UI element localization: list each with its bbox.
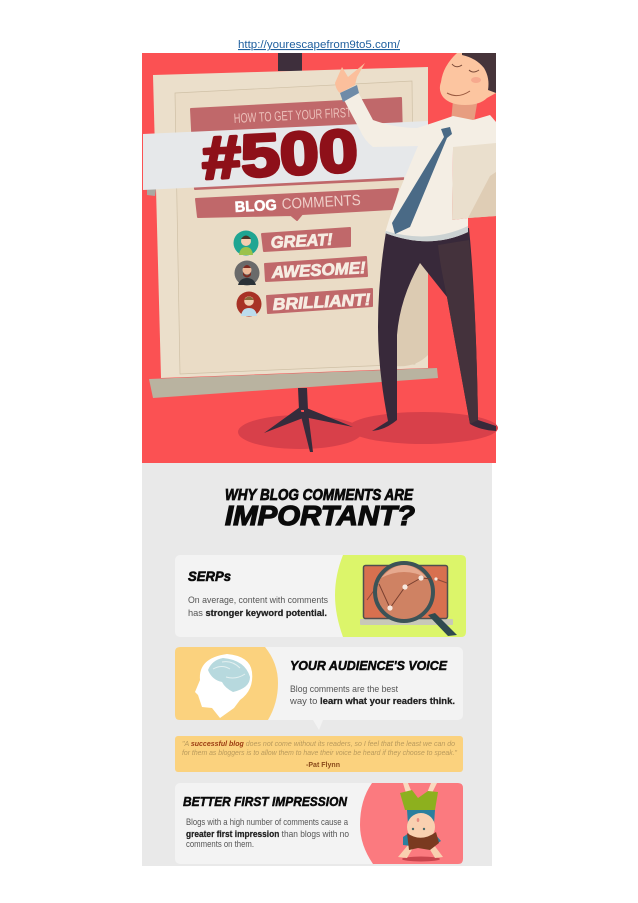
banner shadow xyxy=(147,189,156,196)
board hanger xyxy=(278,53,302,71)
callout: Pat Flynn quote xyxy=(175,736,463,772)
card: better first impression: Blogs with a high number of comments cause a xyxy=(186,817,349,828)
shirt xyxy=(344,92,496,241)
blog comments pill: BLOG xyxy=(234,197,277,216)
card: your audience's voice: Blog comments are the best xyxy=(290,684,398,695)
comment: great xyxy=(234,228,350,256)
heading: WHY BLOG COMMENTS ARE xyxy=(225,487,414,504)
neck xyxy=(451,98,478,122)
card: your audience's voice: YOUR AUDIENCE'S VOICE xyxy=(290,658,447,673)
presentation board xyxy=(149,67,438,398)
floor shadows xyxy=(238,412,498,449)
shirt hem shade xyxy=(385,226,468,241)
card: better first impression: comments on them. xyxy=(186,839,254,850)
panel: hero xyxy=(142,53,498,463)
blog comments pill: COMMENTS xyxy=(281,192,361,213)
comment: awesome: AWESOME! xyxy=(270,259,367,282)
comment: awesome xyxy=(234,257,367,286)
callout: Pat Flynn quote: "A successful blog does not come without its readers, so I feel that the least we can do xyxy=(182,739,455,748)
comment: great: GREAT! xyxy=(270,231,334,252)
light banner xyxy=(143,121,428,190)
callout: Pat Flynn quote: for them as bloggers is to allow them to have their voice be heard if they choose to speak." xyxy=(182,748,457,757)
character: presenter xyxy=(335,53,496,431)
card: your audience's voice xyxy=(175,647,463,730)
card: SERPs: SERPs xyxy=(188,568,231,584)
head xyxy=(440,53,496,105)
heading xyxy=(225,487,415,531)
card: better first impression: greater first impression than blogs with no xyxy=(186,829,349,840)
callout: Pat Flynn quote: -Pat Flynn xyxy=(306,760,340,769)
folder xyxy=(452,143,496,220)
heading: IMPORTANT? xyxy=(225,500,415,531)
card: SERPs xyxy=(175,555,466,637)
pink title pill xyxy=(191,98,403,189)
comment: brilliant xyxy=(236,289,372,316)
card: SERPs: has stronger keyword potential. xyxy=(188,608,327,619)
card: SERPs: On average, content with comments xyxy=(188,595,328,606)
icon: laptop and magnifier xyxy=(360,563,457,636)
comment: brilliant: BRILLIANT! xyxy=(272,291,372,314)
panel: why blog comments xyxy=(142,463,492,866)
card: your audience's voice: way to learn what your readers think. xyxy=(289,696,455,707)
hand xyxy=(335,63,365,93)
cuff xyxy=(340,85,359,102)
card: better first impression: BETTER FIRST IMPRESSION xyxy=(183,794,348,809)
card: better first impression xyxy=(175,783,463,864)
board stand xyxy=(264,388,353,452)
tie xyxy=(392,127,452,234)
headline number: #500 xyxy=(200,117,359,192)
source link: http://yourescapefrom9to5.com/ xyxy=(238,39,401,51)
icon: child doing handstand xyxy=(398,783,443,862)
hair xyxy=(462,53,496,93)
icon: head with brain xyxy=(195,654,252,718)
blog comments pill xyxy=(196,189,398,220)
trousers xyxy=(372,228,496,431)
subtitle: how to get your first: HOW TO GET YOUR FIRST xyxy=(233,105,352,126)
